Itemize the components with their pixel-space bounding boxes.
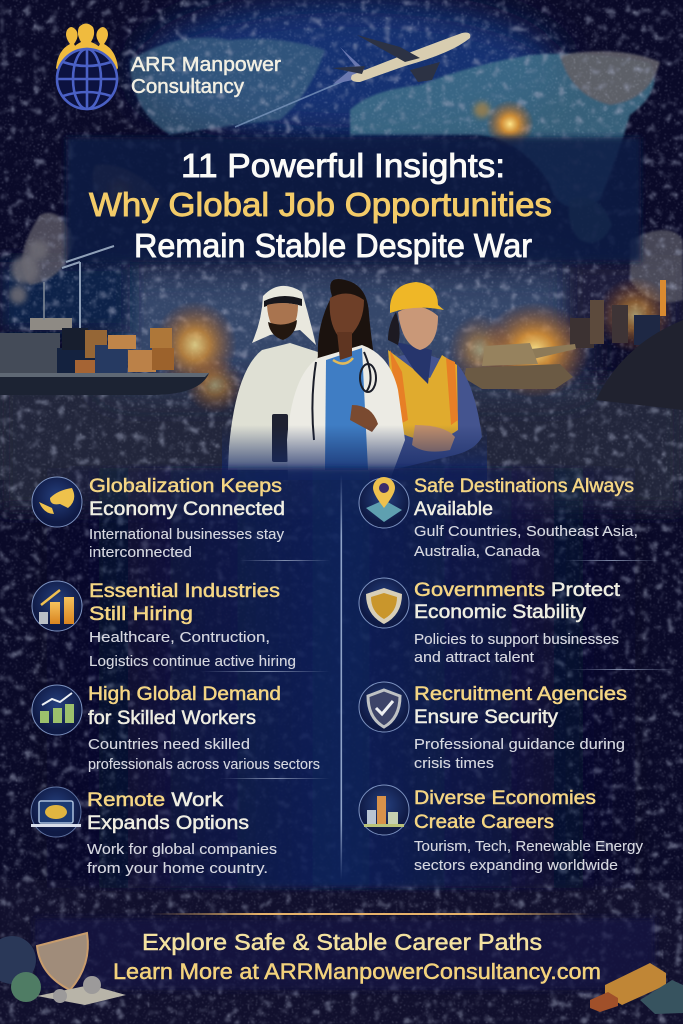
heading xyxy=(414,580,621,623)
description: professionals across various sectors xyxy=(88,757,320,773)
description: crisis times xyxy=(414,756,494,772)
description: Countries need skilled xyxy=(88,737,250,753)
heading: Diverse Economies xyxy=(414,788,596,809)
title band xyxy=(66,137,641,262)
company name: Consultancy xyxy=(131,76,244,98)
insight 4: remote work xyxy=(31,787,277,877)
heading: Economic Stability xyxy=(414,602,587,623)
description: interconnected xyxy=(89,545,192,561)
crane xyxy=(62,246,114,330)
description: International businesses stay xyxy=(89,527,285,543)
heading: Available xyxy=(414,499,493,520)
logo xyxy=(56,24,281,109)
description xyxy=(414,632,619,666)
title: Remain Stable Despite War xyxy=(134,227,532,264)
heading xyxy=(414,476,634,520)
world map with continents xyxy=(22,38,683,302)
description: Tourism, Tech, Renewable Energy xyxy=(414,839,644,855)
heading: Create Careers xyxy=(414,812,554,833)
description xyxy=(414,737,625,772)
smoke left xyxy=(9,240,48,304)
insight 2: essential industries xyxy=(32,581,296,670)
title: Why Global Job Opportunities xyxy=(89,186,552,223)
call to action xyxy=(113,929,601,984)
heading: Globalization Keeps xyxy=(89,476,282,497)
heading xyxy=(88,684,281,729)
title: 11 Powerful Insights: xyxy=(181,147,505,184)
insight 3: global demand xyxy=(32,684,320,773)
heading xyxy=(414,788,596,833)
cargo ship with containers xyxy=(0,282,209,395)
description: Healthcare, Contruction, xyxy=(89,630,270,646)
description: Logistics continue active hiring xyxy=(89,654,296,670)
company name: ARR Manpower xyxy=(131,54,281,76)
description: Policies to support businesses xyxy=(414,632,619,648)
insight 7: recruitment agencies xyxy=(359,682,627,772)
sky behind people xyxy=(110,265,580,385)
heading: Economy Connected xyxy=(89,499,285,520)
footer band xyxy=(35,918,655,990)
icon: globe xyxy=(57,49,117,109)
heading xyxy=(89,476,285,520)
heading: for Skilled Workers xyxy=(88,708,256,729)
icon: shield, globe and map xyxy=(0,933,126,1005)
heading: High Global Demand xyxy=(88,684,281,705)
description: and attract talent xyxy=(414,650,534,666)
panel: insights background xyxy=(30,468,675,888)
icon: check shield xyxy=(359,682,409,732)
heading: Recruitment Agencies xyxy=(414,684,627,705)
description xyxy=(414,839,644,874)
heading: Ensure Security xyxy=(414,707,559,728)
icon: laptop xyxy=(31,787,81,837)
heading: Governments Protect xyxy=(414,580,621,601)
lower fade xyxy=(222,425,487,480)
tank xyxy=(464,343,576,389)
description xyxy=(414,524,638,560)
heading: Remote Work xyxy=(87,790,224,811)
insight 6: governments xyxy=(359,578,621,666)
heading xyxy=(87,790,249,834)
description xyxy=(89,527,285,561)
insight 8: diverse economies xyxy=(359,785,644,874)
description xyxy=(87,842,277,877)
worker with helmet xyxy=(388,282,482,470)
fires behind scene xyxy=(153,277,673,413)
heading xyxy=(89,581,280,625)
icon: map pin xyxy=(359,477,409,528)
description: Australia, Canada xyxy=(414,544,541,560)
man in thobe xyxy=(228,286,318,470)
icon: bar chart xyxy=(32,581,82,631)
description: from your home country. xyxy=(87,861,268,877)
heading: Expands Options xyxy=(87,813,249,834)
icon: city sectors xyxy=(359,785,409,835)
icon: cargo containers xyxy=(590,963,683,1014)
footer xyxy=(0,913,683,1014)
company name xyxy=(131,54,281,98)
icon: rising chart xyxy=(32,685,82,735)
heading: Still Hiring xyxy=(89,604,193,625)
icon: globe map xyxy=(32,477,82,527)
doctor xyxy=(287,279,405,480)
heading: Safe Destinations Always xyxy=(414,476,634,497)
heading: Essential Industries xyxy=(89,581,280,602)
insight 1: globalization xyxy=(32,476,285,561)
icon: gold shield xyxy=(359,578,409,628)
title xyxy=(89,147,552,264)
insight 5: safe destinations xyxy=(359,476,638,560)
icon: three people xyxy=(56,24,118,74)
three workers xyxy=(222,279,487,480)
airplane with contrail xyxy=(235,33,470,127)
city skyline burning xyxy=(570,280,683,410)
call to action: Learn More at ARRManpowerConsultancy.com xyxy=(113,959,601,984)
description xyxy=(89,630,296,670)
explosion on map xyxy=(104,100,534,206)
description: sectors expanding worldwide xyxy=(414,858,618,874)
heading xyxy=(414,684,627,728)
call to action: Explore Safe & Stable Career Paths xyxy=(142,929,542,955)
description: Gulf Countries, Southeast Asia, xyxy=(414,524,638,540)
description xyxy=(88,737,320,773)
description: Work for global companies xyxy=(87,842,277,858)
description: Professional guidance during xyxy=(414,737,625,753)
